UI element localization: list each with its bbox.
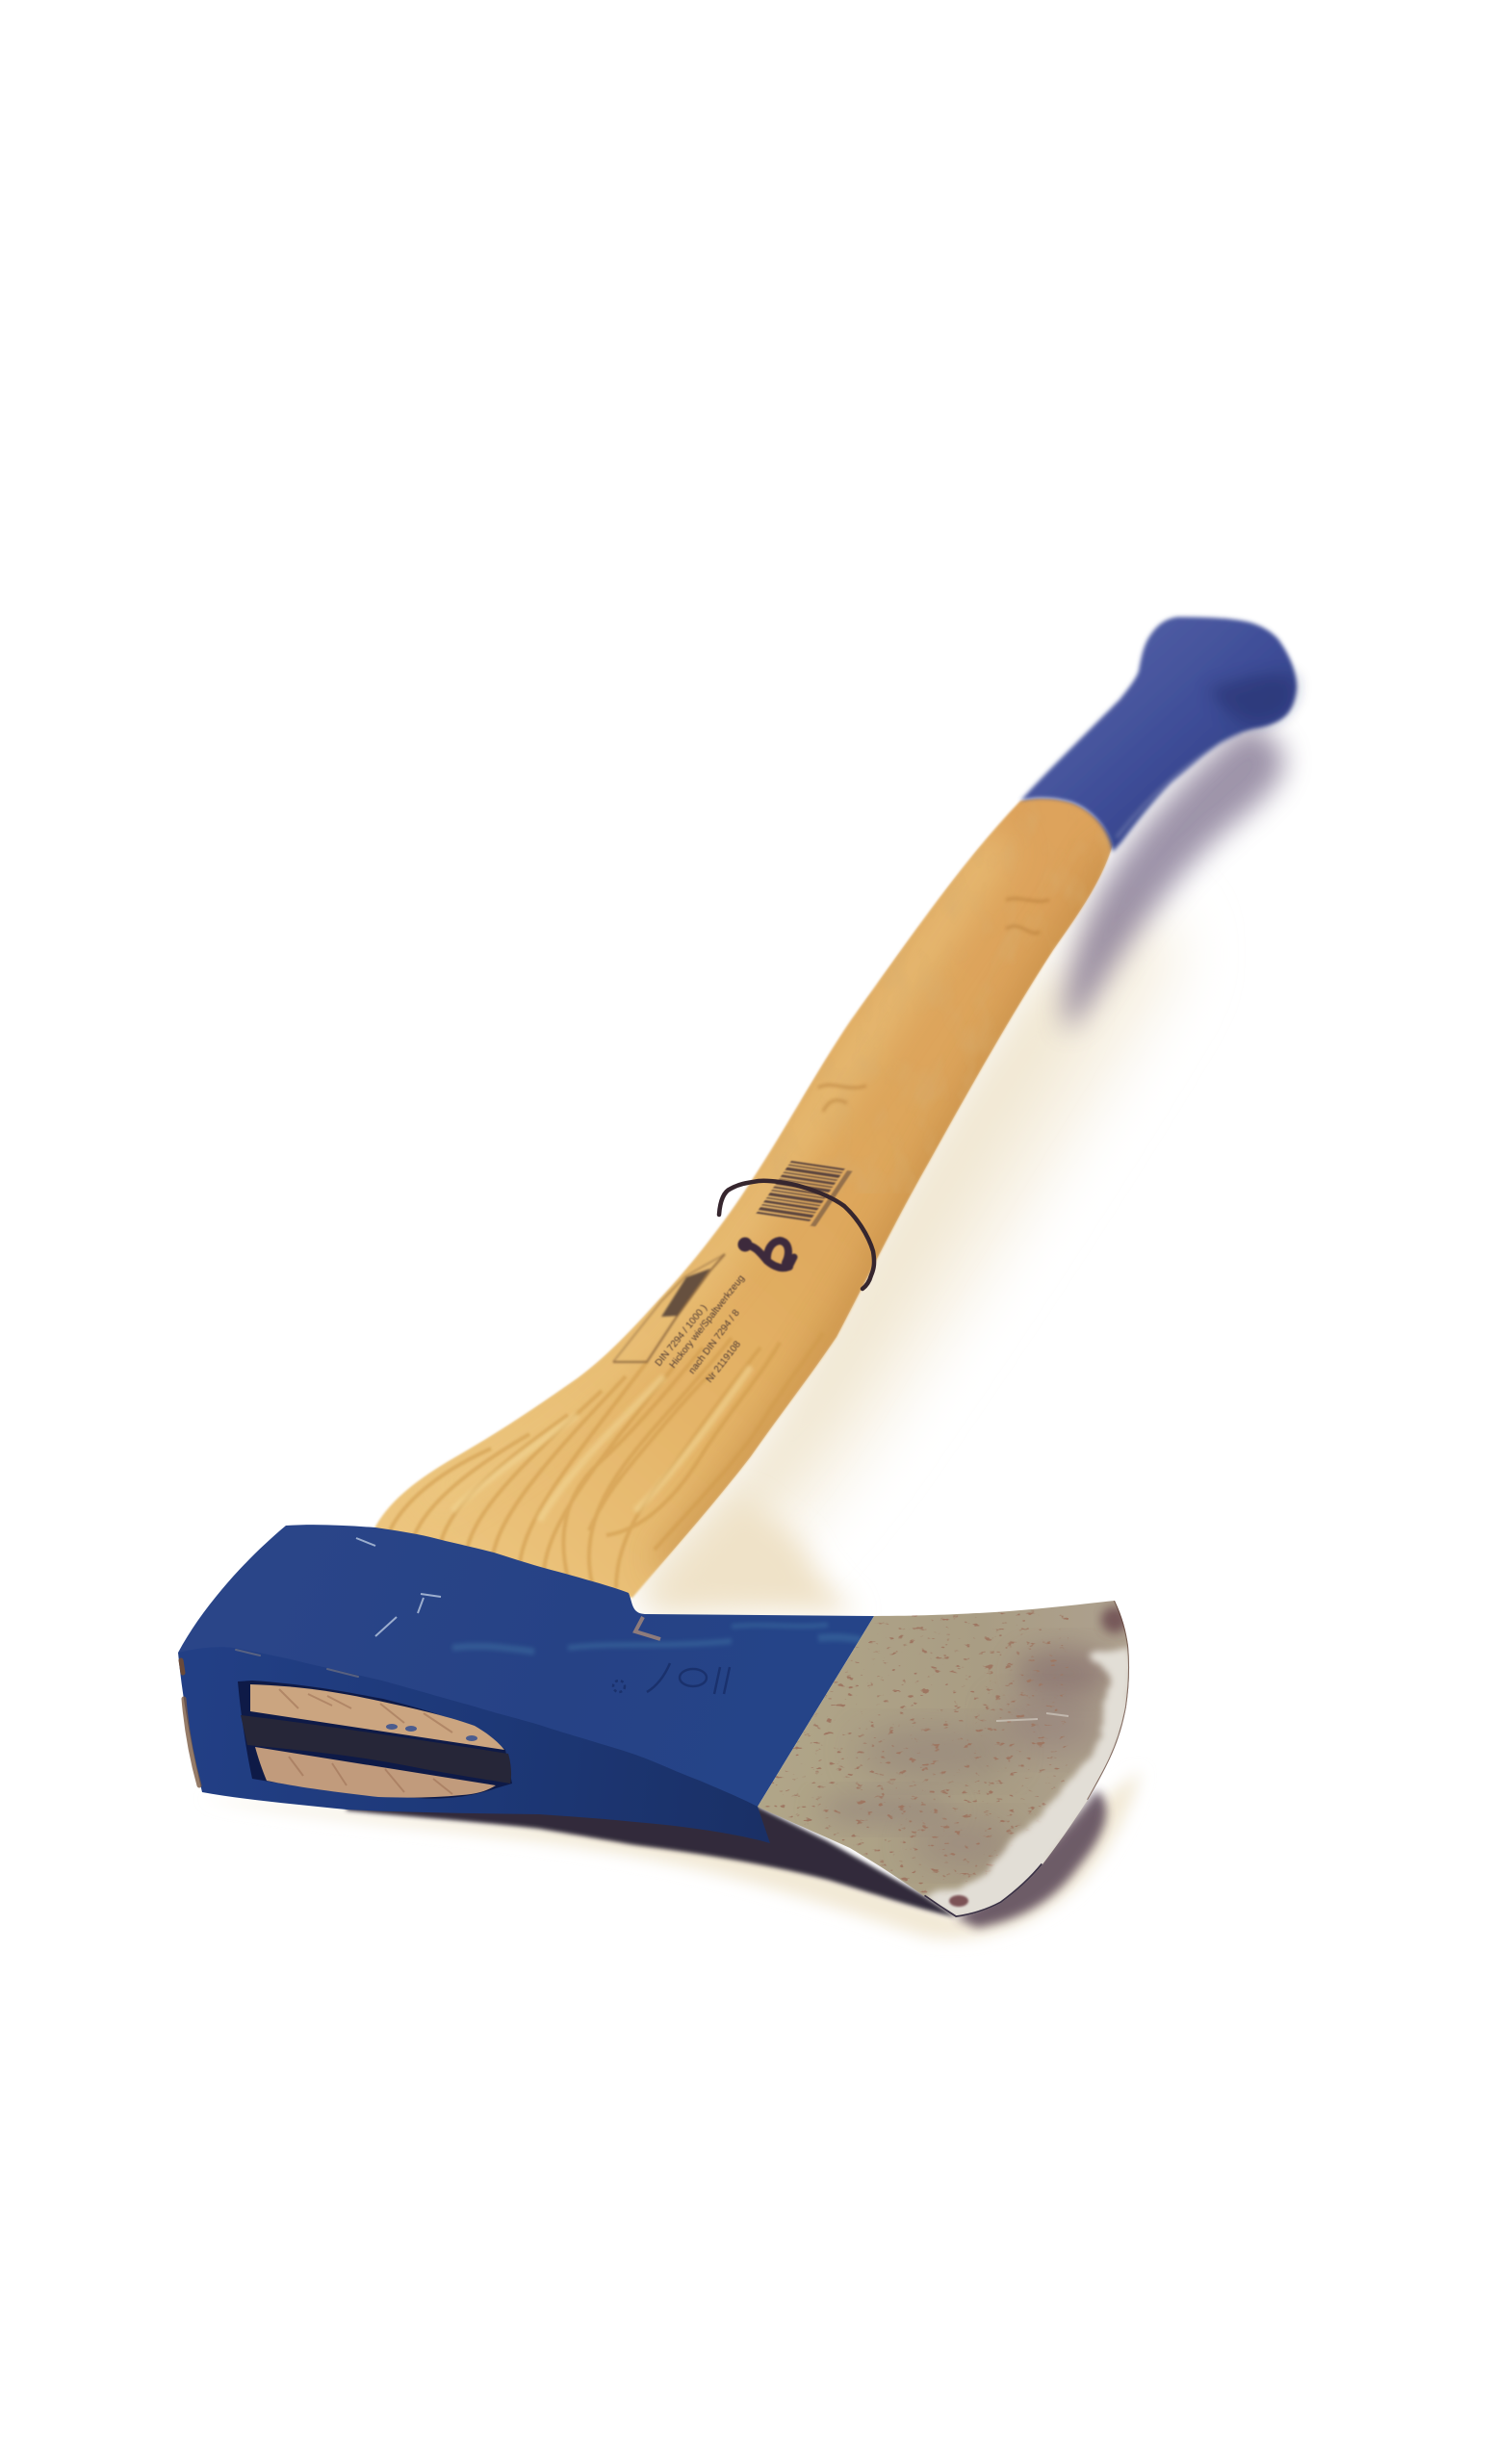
handle print: small text: DIN 7294 / 1000 ) — [654, 1303, 709, 1369]
handle print: small text: nach DIN 7294 / 8 — [687, 1307, 742, 1376]
shadow under axe head — [202, 1771, 1141, 1938]
handle print: label box — [613, 1254, 725, 1362]
axe handle: wood — [373, 789, 1126, 1598]
wood grain — [390, 789, 1126, 1588]
axe handle: blue grip — [1020, 617, 1297, 852]
wood lower — [255, 1747, 496, 1798]
head: stamped mark — [613, 1663, 730, 1694]
blue paint flecks on wood — [386, 1724, 477, 1741]
head: front face — [178, 1647, 770, 1843]
handle print: small text: Nr 2119108 — [705, 1339, 743, 1385]
handle band: wire tie — [719, 1181, 874, 1289]
cast shadow on the ground — [635, 724, 1284, 1627]
head: steel blade — [758, 1601, 1132, 1921]
head: left edge wear — [181, 1650, 358, 1785]
head: worn paint streaks — [452, 1625, 862, 1652]
blade: scratches — [996, 1713, 1068, 1721]
head: dark underside — [347, 1800, 956, 1917]
photo: axe on white background — [178, 614, 1305, 1944]
wood shading — [424, 837, 1121, 1569]
head: eye with wood end — [238, 1681, 512, 1799]
axe head — [178, 1525, 1132, 1921]
blade: bright ground edge — [924, 1648, 1132, 1921]
blade: purple patina — [818, 1606, 1128, 1868]
head: blue top face — [178, 1525, 874, 1807]
blade: rust speckle — [760, 1607, 1068, 1896]
handle print: small text: Hickory wie/Spaltwerkzeug — [668, 1273, 747, 1371]
wedge — [241, 1715, 511, 1784]
head: rust scratch by the eye of the handle — [635, 1617, 660, 1639]
handle print: logo — [741, 1241, 794, 1268]
handle print: barcode — [754, 1161, 853, 1226]
wood upper — [250, 1684, 504, 1750]
